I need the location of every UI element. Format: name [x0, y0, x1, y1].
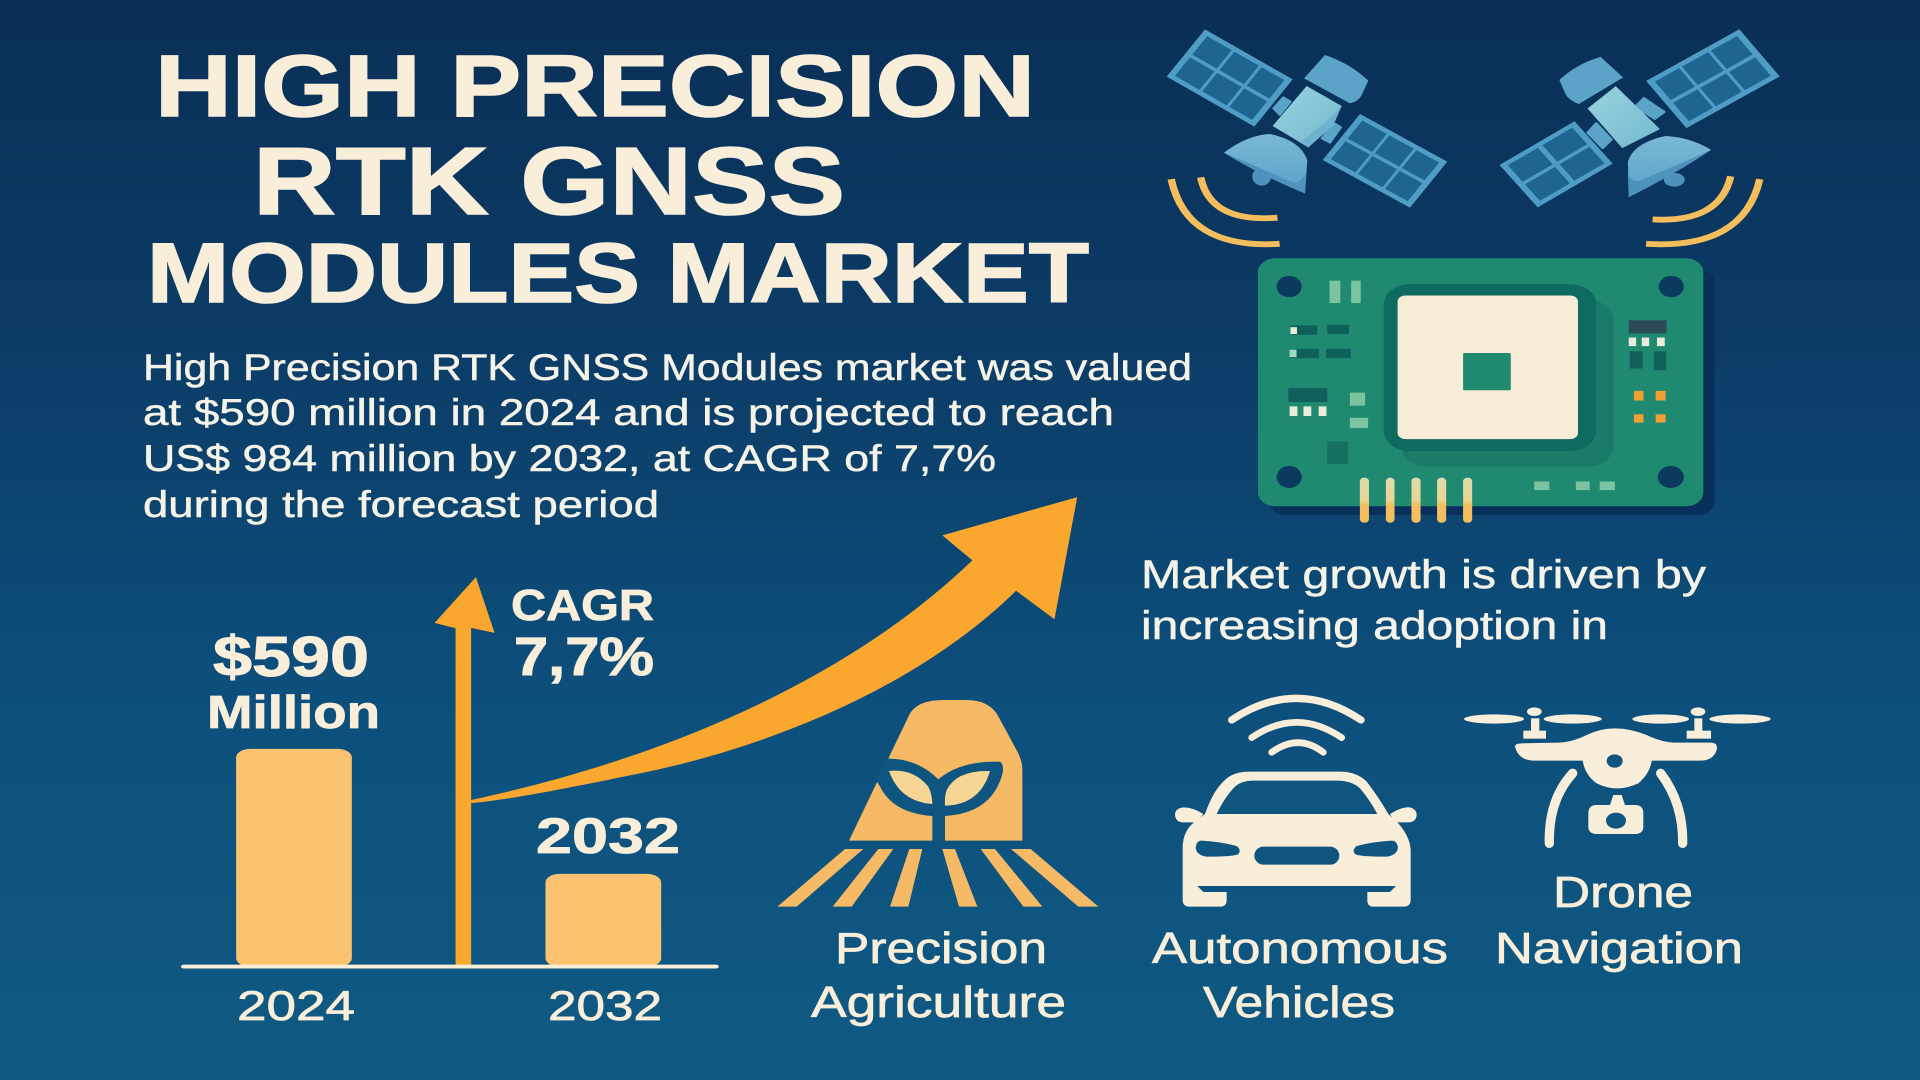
market summary text: during the forecast period — [143, 484, 659, 525]
label: autonomous vehicles: Autonomous — [1152, 924, 1448, 973]
left satellite top dish box — [1304, 55, 1368, 103]
mounting holes — [1277, 276, 1684, 488]
label: precision agriculture — [811, 924, 1066, 1027]
windshield — [1217, 781, 1377, 814]
icon: autonomous vehicle — [1175, 698, 1417, 907]
left satellite lower solar panel — [1323, 114, 1447, 208]
icon: right satellite — [1500, 29, 1780, 207]
left satellite body — [1273, 86, 1342, 147]
axis label 2032: 2032 — [548, 982, 662, 1029]
left satellite antenna foot — [1252, 168, 1271, 186]
icon: drone — [1464, 707, 1771, 843]
propellers — [1464, 707, 1771, 739]
market growth text: increasing adoption in — [1141, 604, 1608, 648]
car body — [1183, 772, 1411, 907]
axis label 2024: 2024 — [237, 982, 355, 1029]
left satellite body edge — [1300, 106, 1342, 147]
GNSS module circuit board — [1258, 258, 1715, 523]
title: HIGH PRECISION — [155, 38, 1035, 135]
market summary text: US$ 984 million by 2032, at CAGR of 7,7% — [143, 438, 996, 479]
value label 2024: $590 — [213, 625, 369, 689]
label: drone navigation: Drone — [1553, 868, 1693, 917]
unit label: Million — [207, 686, 380, 738]
drone camera — [1588, 795, 1643, 834]
board shadow — [1270, 269, 1715, 515]
right satellite upper solar panel — [1646, 29, 1780, 128]
chip face — [1398, 295, 1578, 439]
right satellite connectors — [1588, 98, 1664, 148]
drone body — [1515, 728, 1717, 788]
CAGR value: 7,7% — [514, 627, 654, 687]
left satellite upper solar panel — [1167, 29, 1293, 127]
field silhouette — [849, 700, 1022, 841]
dark components — [1288, 320, 1666, 464]
market summary text: High Precision RTK GNSS Modules market was valued — [143, 347, 1192, 388]
component legs — [1290, 327, 1665, 416]
icon: left satellite — [1167, 29, 1447, 208]
CAGR label: CAGR — [511, 581, 654, 630]
bar 2032 — [545, 874, 661, 967]
title: RTK GNSS — [253, 128, 845, 235]
crop rows — [777, 849, 1098, 907]
market summary text: at $590 million in 2024 and is projected to reach — [143, 392, 1114, 433]
right satellite antenna foot — [1664, 173, 1685, 187]
right satellite dish — [1628, 136, 1711, 197]
connector pins — [1360, 478, 1472, 523]
left satellite dish rim — [1224, 153, 1307, 193]
label: precision agriculture: Precision — [835, 924, 1047, 973]
chip shadow — [1401, 300, 1614, 467]
bar 2024 — [236, 749, 352, 967]
right satellite dish rim — [1628, 150, 1711, 197]
market growth text — [1141, 553, 1706, 648]
left satellite dish — [1224, 134, 1307, 193]
right satellite lower solar panel — [1500, 121, 1613, 207]
drone eye — [1607, 754, 1623, 768]
sprout outline — [876, 759, 1003, 842]
label: autonomous vehicles — [1152, 924, 1448, 1027]
headlights and grille — [1196, 841, 1398, 865]
car mirrors — [1175, 807, 1417, 822]
signal arcs — [1171, 176, 1760, 244]
label: autonomous vehicles: Vehicles — [1203, 978, 1395, 1027]
label: precision agriculture: Agriculture — [811, 978, 1066, 1027]
vertical growth arrow — [435, 577, 495, 966]
label: drone navigation — [1495, 868, 1743, 973]
wireless signal — [1232, 698, 1361, 752]
chip center square — [1463, 353, 1511, 390]
bar chart — [181, 497, 1077, 1029]
orange contact pads — [1634, 391, 1666, 423]
bar chart shapes — [181, 497, 1077, 969]
board — [1258, 258, 1703, 506]
chip frame — [1384, 284, 1596, 451]
title: MODULES MARKET — [147, 226, 1089, 320]
drone legs — [1549, 773, 1683, 843]
left satellite connectors — [1273, 97, 1341, 143]
right satellite body — [1588, 86, 1660, 148]
label: drone navigation: Navigation — [1495, 924, 1743, 973]
sprout leaves — [889, 771, 990, 806]
icon: precision agriculture — [777, 700, 1098, 907]
right satellite top dish box — [1559, 57, 1623, 104]
market summary text — [143, 347, 1192, 525]
axis — [181, 965, 719, 969]
value label 2032: 2032 — [536, 808, 680, 864]
light components — [1330, 281, 1615, 490]
camera lens — [1606, 813, 1626, 829]
title — [147, 38, 1089, 320]
market growth text: Market growth is driven by — [1141, 553, 1706, 597]
curved growth arrow — [471, 497, 1077, 803]
